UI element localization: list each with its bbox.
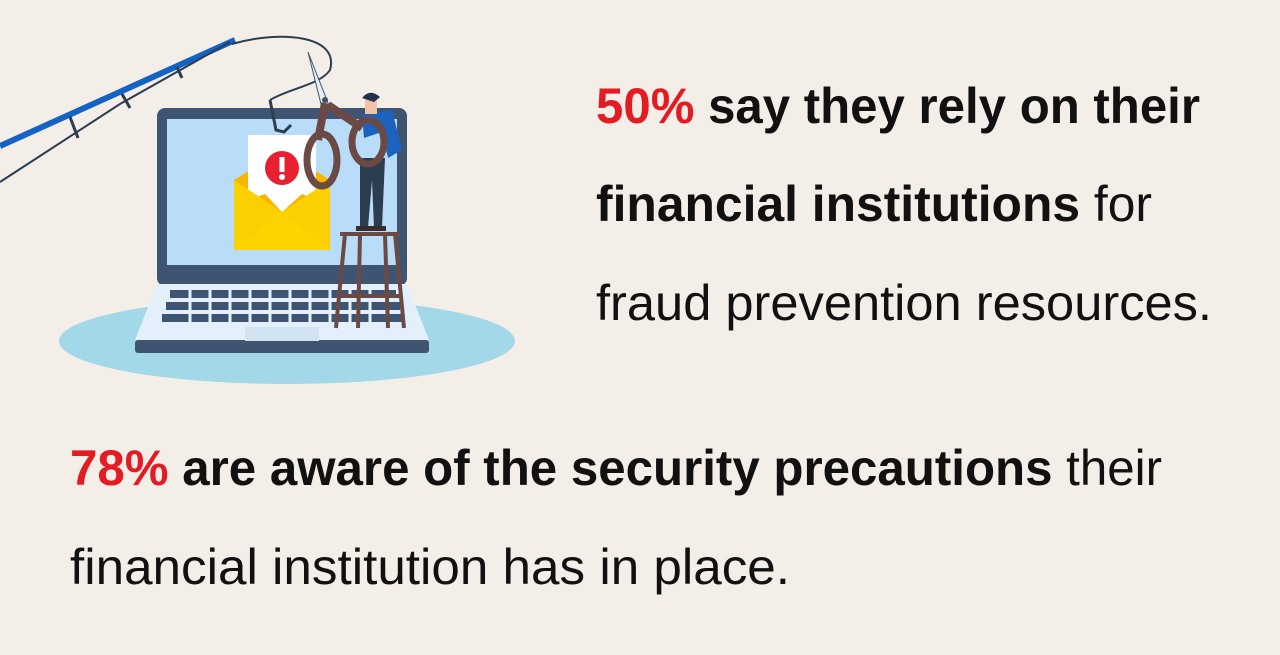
ladder: [336, 234, 404, 328]
scissors and person: [307, 52, 402, 231]
stat 2: 78% aware of security precautions: financial institution has in place.: [70, 539, 790, 595]
laptop: [135, 108, 429, 353]
stat 1: 50% rely on financial institutions: financial institutions for: [596, 176, 1152, 232]
illustration: phishing laptop: [0, 37, 515, 384]
stat 1: 50% rely on financial institutions: fraud prevention resources.: [596, 275, 1212, 331]
fishing rod: [0, 37, 331, 182]
stat 1: 50% rely on financial institutions: [596, 78, 1212, 331]
envelope with warning: [234, 100, 330, 250]
shadow ellipse: [59, 298, 515, 384]
stat 2: 78% aware of security precautions: 78% are aware of the security precautions their: [70, 440, 1162, 496]
stat 2: 78% aware of security precautions: [70, 440, 1162, 595]
stat 1: 50% rely on financial institutions: 50% say they rely on their: [596, 78, 1200, 134]
